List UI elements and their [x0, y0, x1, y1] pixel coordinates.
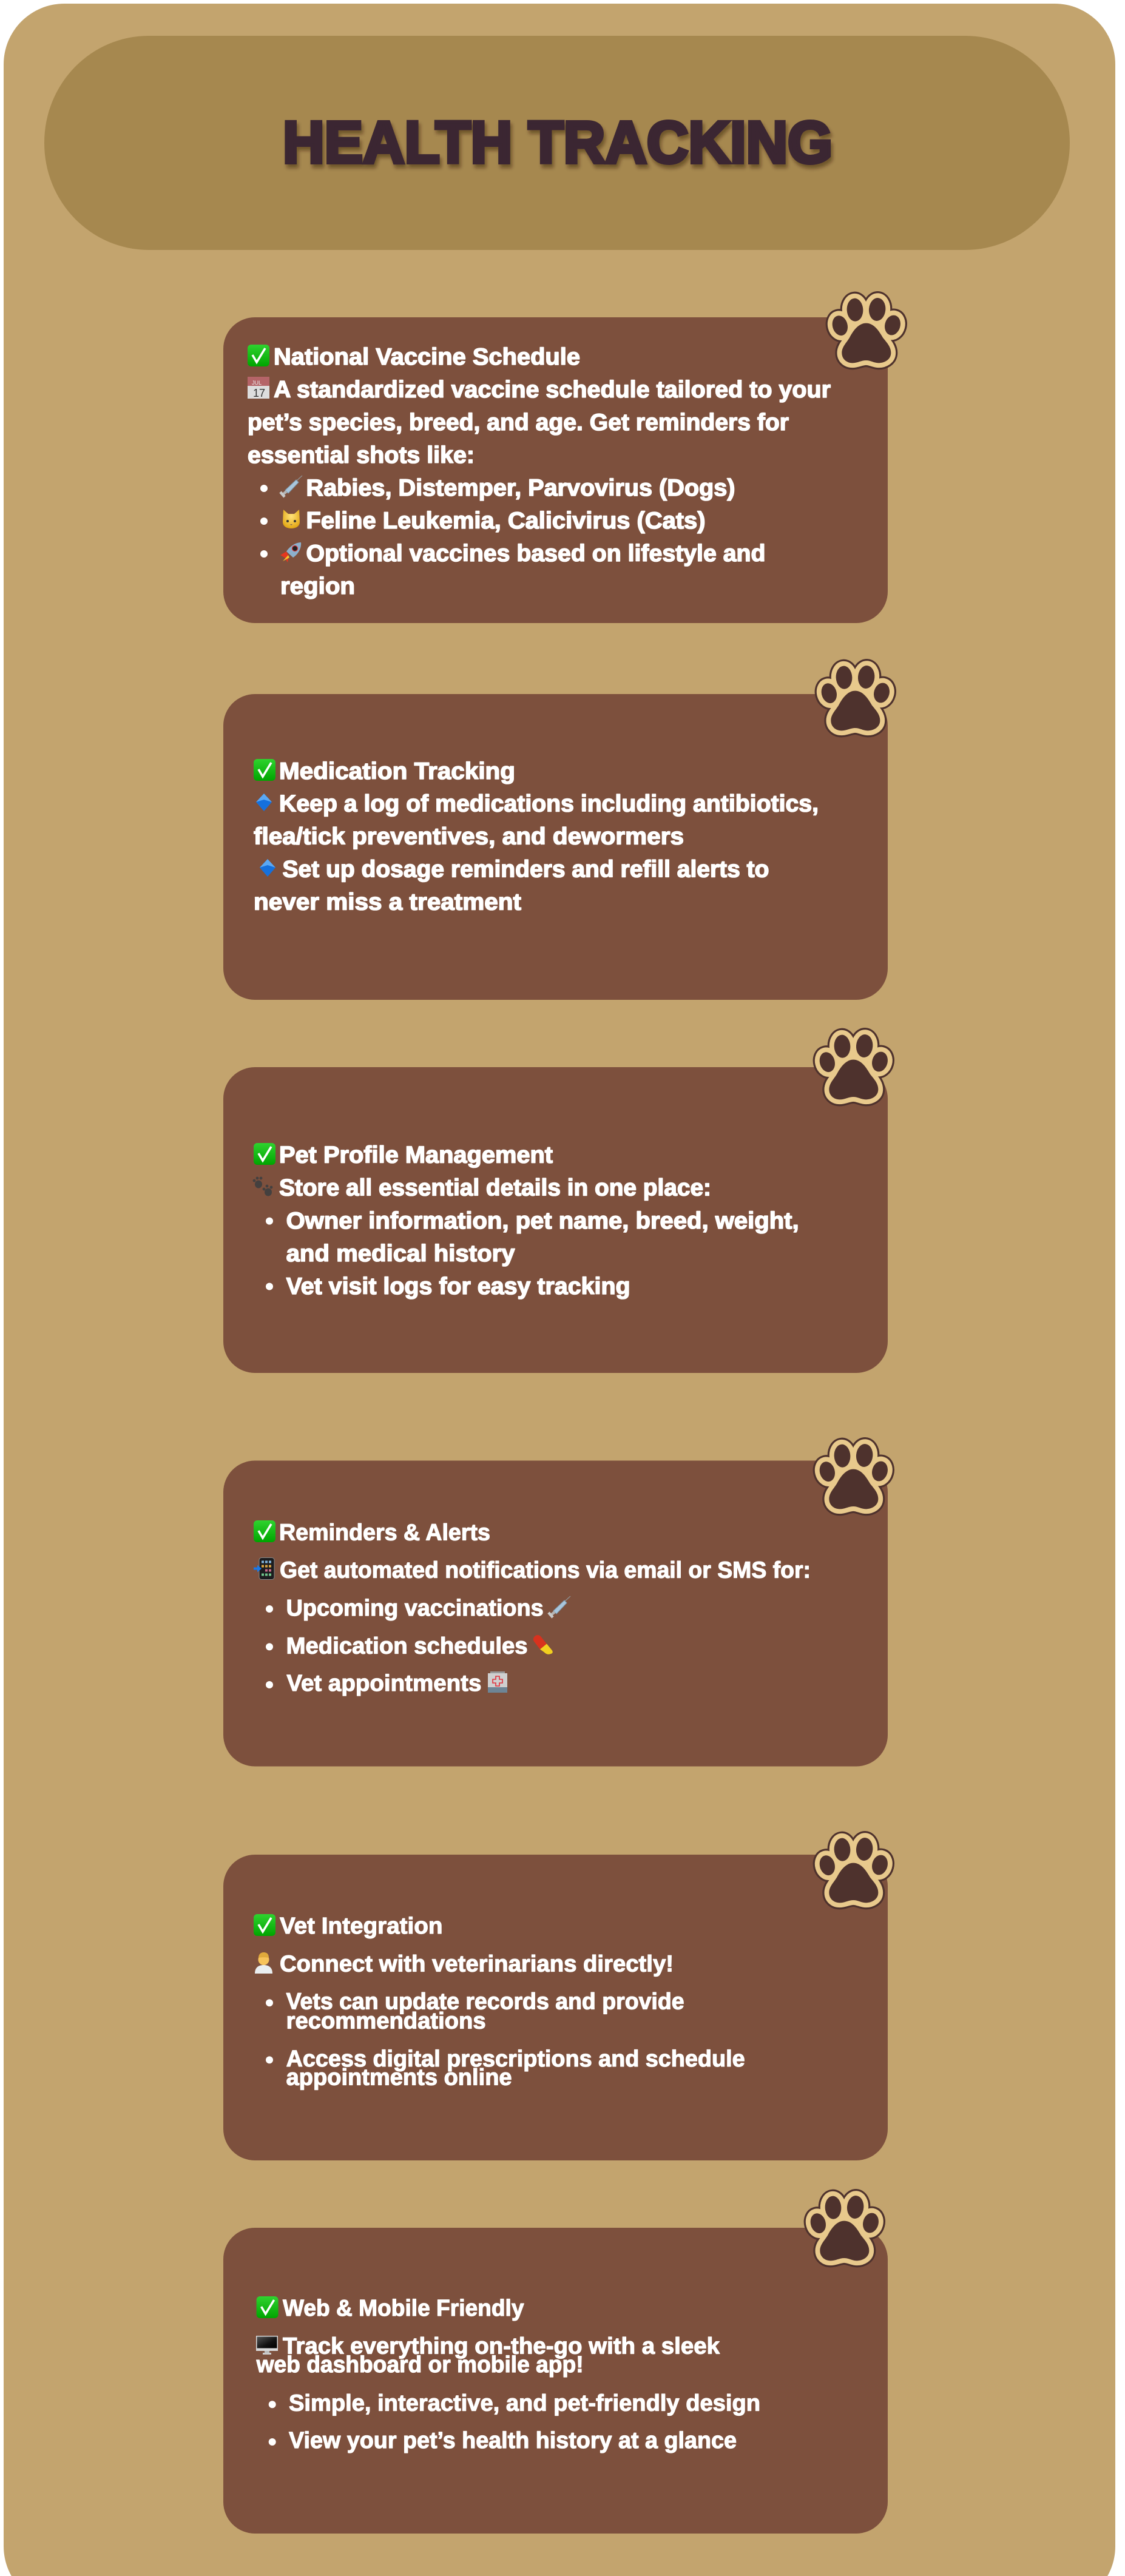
heading: Reminders & Alerts [279, 1520, 490, 1545]
bullet list [266, 1989, 745, 2090]
bullet list: recommendations [286, 2008, 486, 2034]
intro text: Connect with veterinarians directly! [280, 1952, 674, 1977]
header banner [44, 36, 1070, 250]
text block: dosage reminders: never miss a treatment [254, 889, 521, 915]
icon: calendar: JUL [252, 380, 262, 386]
bullet list: Optional vaccines based on lifestyle and [306, 541, 766, 567]
intro text [256, 2333, 720, 2378]
icon: check mark [248, 345, 269, 366]
icon: check mark [257, 2296, 279, 2318]
heading: Pet Profile Management [279, 1142, 553, 1168]
panel: medication tracking [223, 665, 892, 1000]
card background [223, 1461, 888, 1767]
icon: check mark [254, 1914, 275, 1936]
heading: Medication Tracking [279, 758, 515, 784]
icon: check mark [254, 1143, 275, 1165]
panel: pet profile management [223, 1034, 890, 1373]
bullet list: Access digital prescriptions and schedule [286, 2046, 745, 2072]
bullet list: Rabies, Distemper, Parvovirus (Dogs) [306, 475, 735, 501]
card background [223, 317, 888, 623]
bullet list: Owner information, pet name, breed, weight, [286, 1208, 799, 1234]
icon: mobile phone [254, 1558, 274, 1580]
text block: dosage reminders [254, 857, 769, 915]
panel: national vaccine schedule [223, 297, 903, 623]
bullet list: region [280, 573, 355, 599]
card background [223, 694, 888, 1000]
bullet list: Upcoming vaccinations [286, 1596, 544, 1621]
bullet list: Vet appointments [286, 1671, 481, 1696]
bullet list: Vets can update records and provide [286, 1989, 684, 2015]
text block: dosage reminders: Set up dosage reminders and refill alerts to [283, 857, 769, 882]
title: HEALTH TRACKING [283, 109, 833, 175]
heading: Web & Mobile Friendly [283, 2296, 524, 2321]
bullet list: Vet visit logs for easy tracking [286, 1273, 630, 1300]
panel: web and mobile friendly [223, 2195, 888, 2534]
icon: check mark [254, 1520, 275, 1542]
bullet list: appointments online [286, 2065, 512, 2090]
text block: medication log: flea/tick preventives, and dewormers [254, 824, 684, 849]
card background [223, 1067, 888, 1373]
description text: A standardized vaccine schedule tailored to your [274, 377, 831, 403]
card background [223, 1855, 888, 2160]
panel: vet integration [223, 1837, 890, 2160]
icon: paw [817, 1443, 890, 1509]
heading: National Vaccine Schedule [274, 344, 580, 370]
icon: paw [830, 297, 903, 363]
intro text: Store all essential details in one place: [279, 1175, 711, 1201]
intro text: web dashboard or mobile app! [256, 2352, 584, 2378]
bullet list: View your pet’s health history at a glance [289, 2428, 737, 2453]
bullet list: Feline Leukemia, Calicivirus (Cats) [306, 508, 705, 534]
text block: medication log [254, 791, 819, 849]
icon: calendar: 17 [253, 387, 265, 399]
icon: desktop monitor [256, 2336, 278, 2355]
panel: reminders and alerts [223, 1443, 890, 1767]
bullet list [269, 2390, 760, 2453]
description text: essential shots like: [248, 442, 475, 468]
bullet list [260, 475, 766, 599]
icon: paw prints [253, 1177, 272, 1196]
intro text: Get automated notifications via email or SMS for: [280, 1557, 811, 1583]
bullet list: Simple, interactive, and pet-friendly design [289, 2390, 760, 2416]
bullet list [266, 1208, 799, 1300]
bullet list [266, 1596, 570, 1696]
text block: medication log: Keep a log of medications including antibiotics, [279, 791, 819, 817]
icon: doctor [255, 1952, 272, 1974]
icon: paw [817, 1034, 890, 1099]
description text: pet’s species, breed, and age. Get reminders for [248, 410, 789, 436]
description text [248, 377, 831, 468]
icon: paw [808, 2195, 881, 2261]
icon: paw [817, 1837, 890, 1903]
icon: paw [819, 665, 892, 730]
bullet list: Medication schedules [286, 1633, 528, 1659]
icon: calendar [248, 377, 269, 399]
heading: Vet Integration [280, 1913, 443, 1939]
intro text: Track everything on-the-go with a sleek [283, 2333, 720, 2359]
card background [223, 2228, 888, 2534]
bullet list: and medical history [286, 1241, 515, 1267]
icon: check mark [254, 759, 275, 781]
